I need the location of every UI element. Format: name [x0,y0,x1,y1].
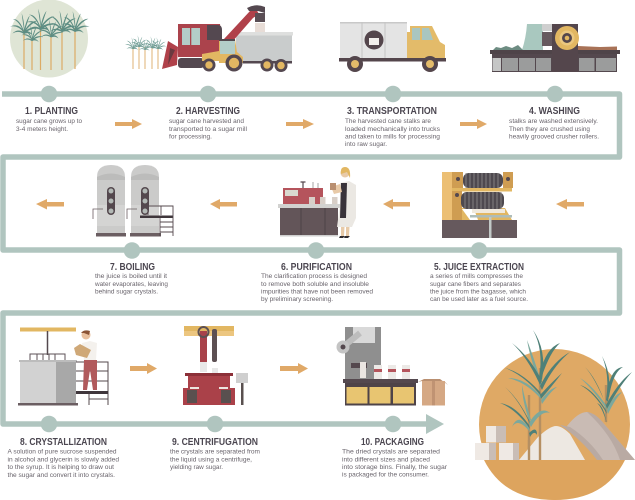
illustration: packaging line [336,327,448,406]
text: crystallization description [8,448,119,479]
text: packaging description: into storage bins. Finally, the sugar [342,464,448,471]
text: boiling description: the juice is boiled until it [95,273,167,280]
text: transportation description: into raw sugar. [345,141,387,148]
text: crystallization description: to the syrup. It is helping to draw out [8,464,114,471]
text: transportation description: The harvested cane stalks are [345,118,431,125]
illustration: laboratory [278,167,356,238]
text: transportation description: and taken to mills for processing [345,134,440,140]
text: planting description [16,118,82,133]
text: harvesting description: sugar cane harvested and [169,118,244,125]
illustration: planting [10,0,90,78]
illustration: sugar and canes circle [475,330,635,500]
text: planting description: sugar cane grows up to [16,118,82,125]
text: packaging description: into different sizes and placed [342,456,430,464]
text: crystallization description: the sugar and convert it into crystals. [8,472,115,479]
path arrowhead [426,414,444,434]
text: boiling description: behind sugar crystals. [95,288,158,296]
text: washing description: stalks are washed extensively. [509,118,598,125]
illustration: harvester [125,5,293,72]
heading: 7. boiling: 7. BOILING [110,261,155,273]
text: transportation description: loaded mechanically into trucks [345,126,441,133]
text: juice extraction description [430,273,528,303]
heading: 4. washing: 4. WASHING [529,105,580,117]
text: harvesting description: for processing. [169,134,212,140]
heading: 9. centrifugation: 9. CENTRIFUGATION [172,436,258,448]
text: crystallization description: in alcohol and glycerin is slowly added [8,456,119,464]
illustration: centrifuge [183,326,248,405]
heading: 10. packaging: 10. PACKAGING [361,436,424,448]
text: packaging description: The dried crystals are separated [342,448,440,456]
text: washing description [509,118,599,140]
text: planting description: 3-4 meters height. [16,126,68,133]
text: juice extraction description: can be used later as a fuel source. [430,296,528,303]
heading: 3. transportation: 3. TRANSPORTATION [347,105,437,117]
illustration: washing machine [490,24,620,72]
text: packaging description: is packaged for the consumer. [342,472,429,478]
illustration: crystallization [18,328,108,406]
text: purification description: impurities that have not been removed [261,288,373,296]
heading: 6. purification: 6. PURIFICATION [281,261,352,273]
text: harvesting description [169,118,247,140]
text: centrifugation description: yielding raw sugar. [170,464,223,471]
text: purification description: The clarification process is designed [261,273,367,280]
step markers [41,86,563,432]
illustration: truck [339,22,446,72]
text: juice extraction description: sugar cane fibers and separates [430,281,522,288]
heading: 2. harvesting: 2. HARVESTING [176,105,240,117]
text: juice extraction description: a series of mills compresses the [430,273,523,280]
text: packaging description [342,448,448,478]
orange direction arrows [36,119,584,374]
text: boiling description: water evaporates, leaving [94,281,168,288]
text: purification description: to remove both soluble and insoluble [261,281,369,288]
text: boiling description [94,273,168,296]
illustration: boiling tanks [93,165,173,236]
text: washing description: heavily grooved crusher rollers. [509,134,599,140]
text: purification description [261,273,373,303]
text: centrifugation description [170,448,260,471]
text: purification description: by preliminary screening. [261,296,333,303]
text: centrifugation description: the liquid using a centrifuge, [170,456,252,464]
text: transportation description [345,118,441,148]
illustration: juice extraction mill [442,172,517,238]
heading: 8. crystallization: 8. CRYSTALLIZATION [20,436,107,448]
text: juice extraction description: the juice from the bagasse, which [430,288,526,296]
process path line [2,94,620,424]
heading: 5. juice extraction: 5. JUICE EXTRACTION [434,261,524,273]
text: crystallization description: A solution of pure sucrose suspended [8,448,117,456]
text: centrifugation description: the crystals are separated from [170,448,260,456]
cane leaves [500,330,632,437]
text: harvesting description: transported to a sugar mill [169,126,247,133]
text: washing description: Then they are crushed using [509,126,590,133]
heading: 1. planting: 1. PLANTING [25,105,78,117]
